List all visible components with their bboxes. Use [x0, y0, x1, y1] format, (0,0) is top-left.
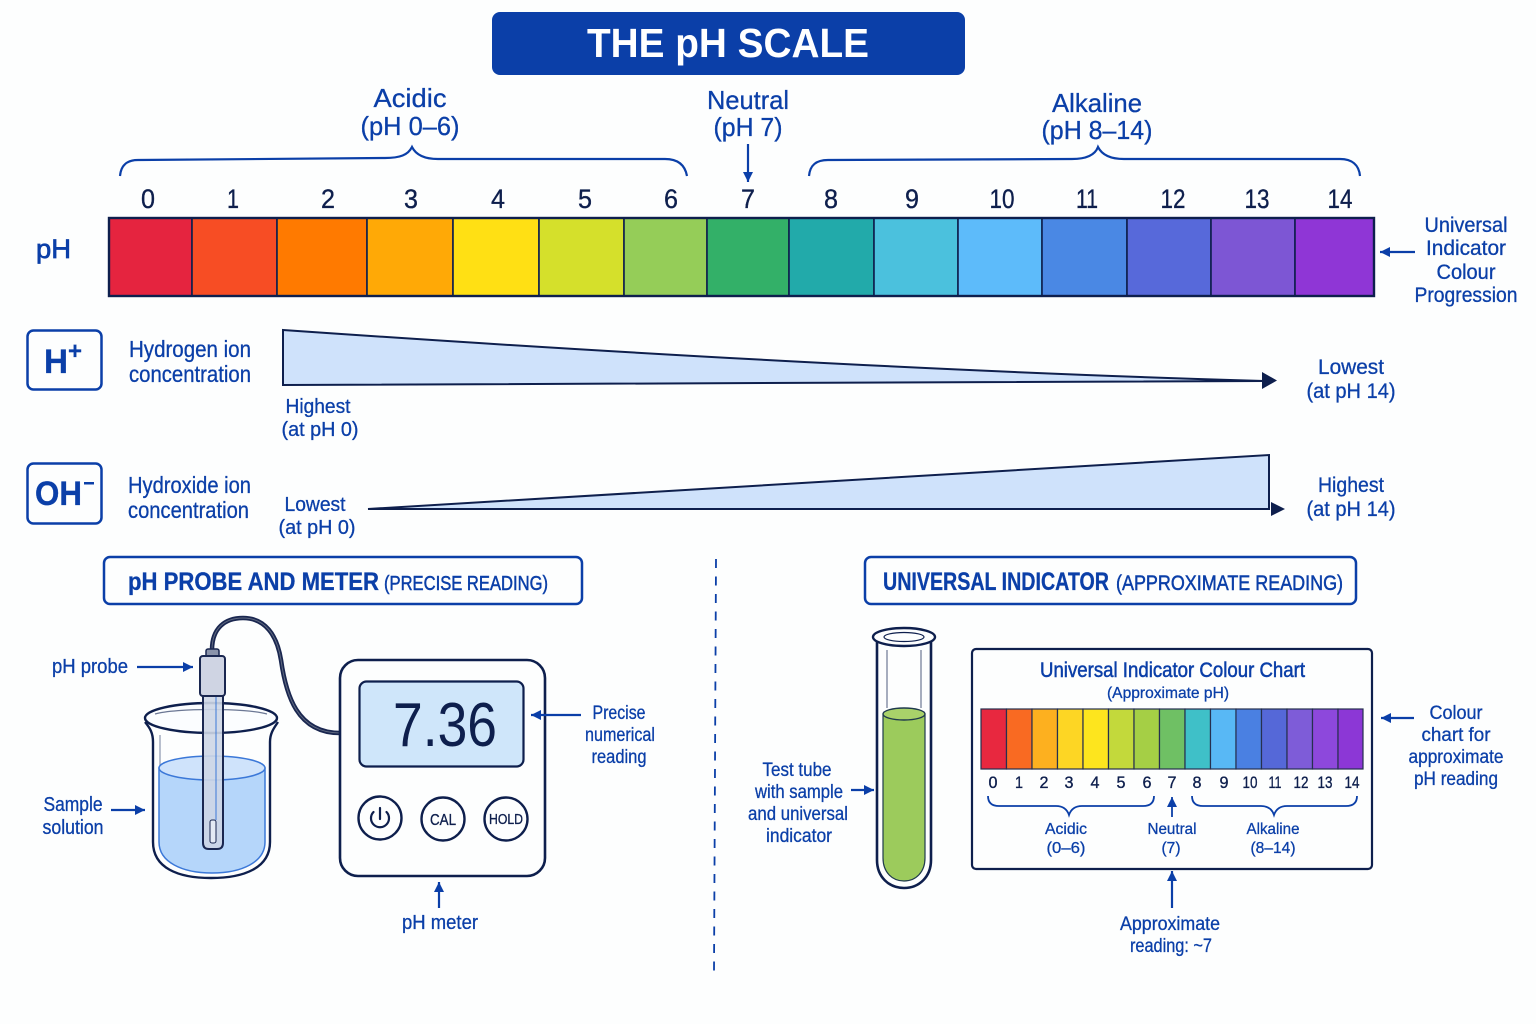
- hydroxide ion label: Hydroxide ion: [128, 472, 251, 498]
- icon: H+: +: [68, 338, 82, 365]
- beaker with sample solution: [145, 703, 278, 878]
- pH numbers: 14: [1328, 184, 1352, 214]
- colour progression note: Universal: [1424, 214, 1508, 237]
- alkaline range label: (pH 8–14): [1042, 115, 1152, 145]
- swatch numbers: 11: [1268, 773, 1282, 792]
- colour chart note: Colour: [1430, 703, 1483, 724]
- power button: [358, 796, 402, 840]
- hydrogen ion wedge: [283, 330, 1277, 389]
- alkaline range label: [809, 88, 1360, 176]
- alkaline bracket: Alkaline: [1246, 821, 1300, 838]
- precise numerical reading label: [531, 703, 655, 768]
- pH numbers: 2: [321, 184, 335, 214]
- colour chart note: pH reading: [1414, 769, 1498, 790]
- HOLD button: HOLD: [489, 811, 523, 828]
- test tube label: and universal: [748, 804, 848, 825]
- approximate reading callout: reading: ~7: [1130, 936, 1212, 957]
- swatch numbers: 10: [1242, 773, 1258, 792]
- neutral range label: (pH 7): [714, 112, 782, 142]
- hydroxide highest label: Highest: [1318, 474, 1384, 497]
- colour chart note: approximate: [1408, 747, 1504, 768]
- approximate reading callout: [1120, 871, 1220, 957]
- pH numbers: 5: [578, 184, 592, 214]
- test tube label: with sample: [754, 782, 843, 803]
- pH colour bar: [109, 218, 1374, 296]
- pH numbers: 10: [990, 184, 1014, 214]
- hydrogen ion label: concentration: [129, 361, 251, 387]
- hydrogen ion label: Hydrogen ion: [129, 336, 251, 362]
- acidic range label: [120, 83, 687, 176]
- chart subtitle: (Approximate pH): [1107, 685, 1229, 702]
- colour swatches: [981, 709, 1363, 769]
- pH meter: [340, 660, 545, 876]
- pH numbers: 9: [905, 184, 919, 214]
- pH numbers: [141, 184, 1352, 214]
- swatch numbers: 9: [1220, 773, 1228, 792]
- alkaline bracket: [1192, 796, 1357, 857]
- colour progression note: Indicator: [1426, 237, 1506, 260]
- neutral marker: (7): [1162, 840, 1180, 857]
- colour progression note: Colour: [1436, 261, 1496, 284]
- precise numerical reading label: Precise: [592, 703, 646, 724]
- sample solution label: Sample: [44, 794, 102, 816]
- CAL button: CAL: [430, 812, 456, 829]
- icon: H+: [28, 330, 102, 390]
- heading: universal indicator: [865, 557, 1356, 604]
- approximate reading callout: Approximate: [1120, 914, 1220, 935]
- colour chart note: chart for: [1422, 725, 1491, 746]
- pH numbers: 13: [1244, 184, 1270, 214]
- icon: OH-: [28, 464, 102, 524]
- swatch numbers: 5: [1116, 773, 1126, 792]
- swatch numbers: 0: [988, 773, 998, 792]
- swatch numbers: 2: [1040, 773, 1048, 792]
- pH numbers: 8: [824, 184, 838, 214]
- probe cable: [212, 618, 340, 733]
- CAL button: [422, 798, 464, 840]
- pH numbers: 0: [141, 184, 155, 214]
- pH numbers: 4: [491, 184, 505, 214]
- hydrogen highest label: Highest: [286, 396, 351, 418]
- heading: universal indicator: UNIVERSAL INDICATOR: [883, 568, 1109, 596]
- icon: H+: H: [44, 343, 68, 381]
- pH axis label: pH: [36, 234, 71, 264]
- precise numerical reading label: reading: [592, 747, 646, 768]
- pH numbers: 12: [1160, 184, 1186, 214]
- pH probe: [200, 649, 225, 849]
- hydroxide ion label: concentration: [128, 497, 249, 523]
- acidic bracket: (0–6): [1046, 840, 1086, 857]
- acidic bracket: Acidic: [1045, 821, 1087, 838]
- meter display: 7.36: [393, 691, 497, 760]
- hydrogen lowest label: Lowest: [1318, 356, 1384, 379]
- title: THE pH SCALE: [587, 20, 869, 66]
- swatch numbers: 4: [1090, 773, 1100, 792]
- hydroxide highest label: [1306, 474, 1396, 521]
- pH numbers: 3: [404, 184, 418, 214]
- colour progression note: Progression: [1414, 284, 1518, 307]
- alkaline bracket: (8–14): [1250, 840, 1296, 857]
- pH meter label: pH meter: [402, 912, 478, 934]
- hydrogen highest label: (at pH 0): [282, 419, 358, 441]
- hydroxide ion wedge: [368, 455, 1285, 516]
- test tube label: Test tube: [762, 760, 832, 781]
- swatch numbers: 14: [1344, 773, 1360, 792]
- hydrogen highest label: [282, 396, 358, 441]
- swatch numbers: 7: [1168, 773, 1176, 792]
- neutral marker: Neutral: [1148, 821, 1196, 838]
- hydroxide lowest label: (at pH 0): [278, 517, 356, 539]
- swatch numbers: 3: [1064, 773, 1074, 792]
- pH meter label: [402, 882, 478, 934]
- heading: pH probe and meter: pH PROBE AND METER: [128, 568, 379, 596]
- swatch numbers: 1: [1015, 773, 1023, 792]
- icon: OH-: OH: [35, 475, 82, 513]
- colour chart note: [1381, 703, 1504, 790]
- precise numerical reading label: numerical: [585, 725, 655, 746]
- colour progression note: [1380, 214, 1518, 307]
- swatch numbers: 6: [1142, 773, 1152, 792]
- heading: universal indicator: (APPROXIMATE READING): [1116, 572, 1343, 595]
- pH numbers: 11: [1076, 184, 1098, 214]
- swatch numbers: 13: [1318, 773, 1332, 792]
- acidic bracket: [988, 796, 1154, 857]
- test tube label: indicator: [766, 826, 833, 847]
- heading: pH probe and meter: [104, 557, 582, 604]
- hydrogen lowest label: (at pH 14): [1306, 380, 1396, 403]
- hydroxide highest label: (at pH 14): [1306, 498, 1396, 521]
- neutral range label: Neutral: [707, 85, 789, 115]
- panel: universal indicator colour chart: [972, 649, 1372, 869]
- swatch numbers: 8: [1192, 773, 1202, 792]
- neutral range label: [707, 85, 789, 182]
- heading: pH probe and meter: (PRECISE READING): [384, 573, 548, 595]
- pH numbers: 6: [664, 184, 678, 214]
- test tube label: [748, 760, 874, 847]
- swatch numbers: 12: [1294, 773, 1308, 792]
- hydroxide ion label: [128, 472, 251, 523]
- pH numbers: 7: [741, 184, 755, 214]
- acidic range label: Acidic: [374, 83, 446, 113]
- acidic range label: (pH 0–6): [360, 111, 460, 141]
- sample solution label: solution: [42, 817, 104, 839]
- chart title: Universal Indicator Colour Chart: [1040, 659, 1305, 682]
- hydroxide lowest label: [278, 494, 356, 539]
- hydrogen ion label: [129, 336, 251, 387]
- meter display: [360, 682, 524, 766]
- sample solution label: [42, 794, 145, 839]
- swatch numbers: [988, 773, 1360, 792]
- test tube: [873, 628, 935, 888]
- alkaline range label: Alkaline: [1052, 88, 1142, 118]
- pH numbers: 1: [227, 184, 239, 214]
- hydroxide lowest label: Lowest: [284, 494, 346, 516]
- title: [492, 12, 965, 75]
- pH probe label: pH probe: [52, 656, 128, 678]
- hydrogen lowest label: [1306, 356, 1396, 403]
- HOLD button: [484, 798, 528, 840]
- neutral marker: [1148, 797, 1196, 857]
